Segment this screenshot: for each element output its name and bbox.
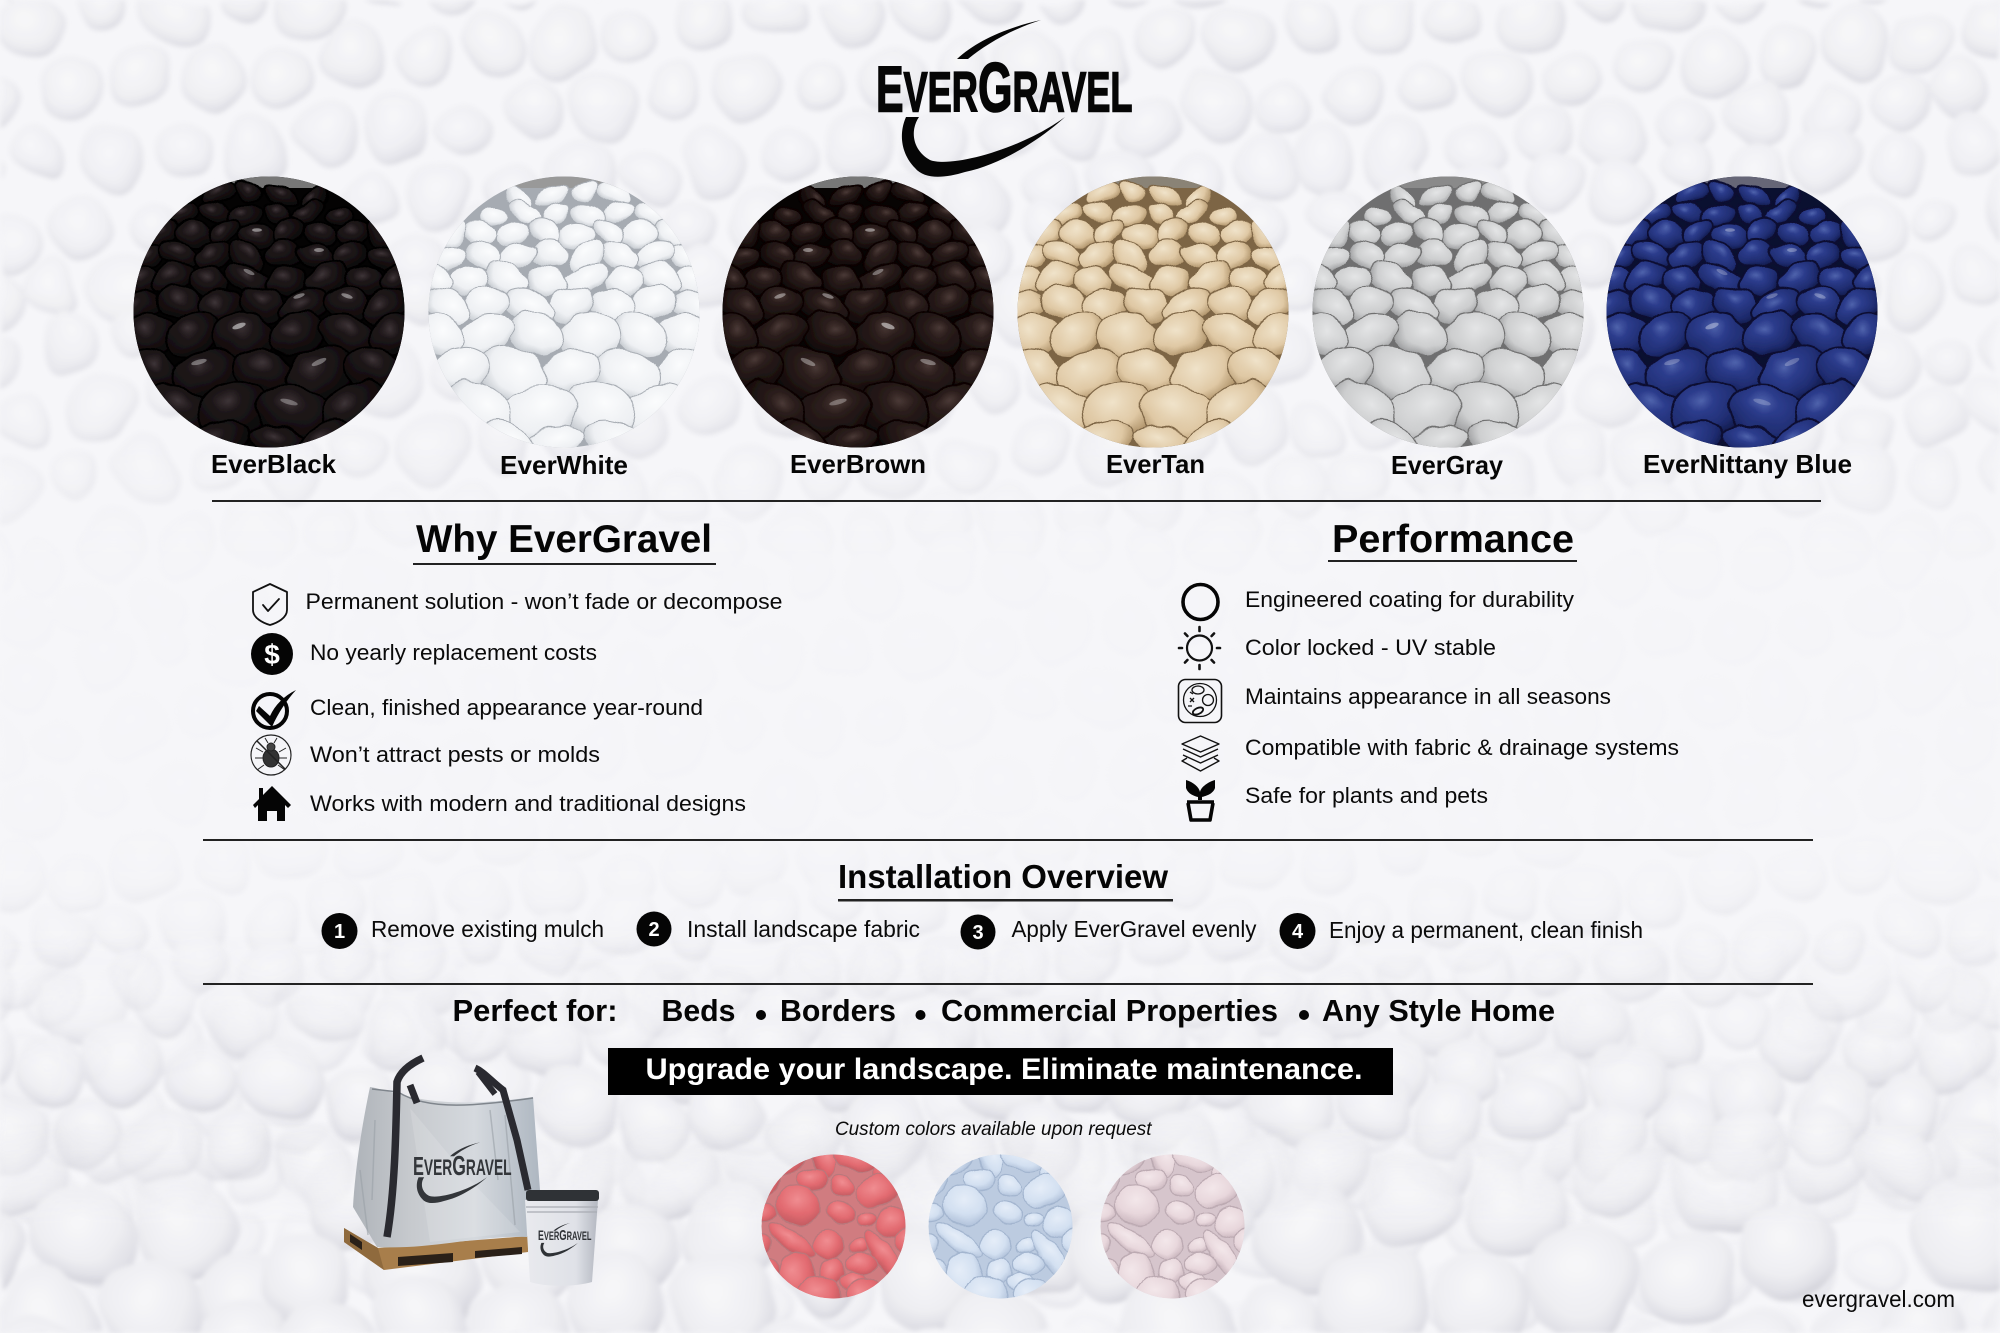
icon: shield	[253, 584, 287, 625]
perfect for row: Any Style Home	[1322, 993, 1555, 1028]
icon: dollar: $	[264, 639, 280, 670]
step 2: Install landscape fabric	[687, 916, 920, 942]
panel: performance	[1178, 518, 1679, 820]
step 3	[960, 914, 1257, 950]
step 4: Enjoy a permanent, clean finish	[1329, 917, 1643, 943]
icon: layers	[1182, 736, 1219, 771]
text: engineered coating: Engineered coating for durability	[1245, 587, 1574, 612]
text: permanent solution: Permanent solution - won’t fade or decompose	[306, 589, 782, 614]
swatch: EverGray	[1312, 176, 1584, 448]
icon: dollar	[251, 633, 293, 675]
swatch: EverNittany Blue	[1606, 176, 1878, 448]
logo: EVERGRAVEL	[876, 49, 1132, 127]
icon: plant pot	[1186, 780, 1215, 820]
label: EverTan: EverTan	[1106, 449, 1205, 479]
text: no pests: Won’t attract pests or molds	[310, 742, 600, 767]
swatch: EverBlack	[134, 176, 404, 448]
text: safe for plants: Safe for plants and pets	[1245, 783, 1488, 808]
logo	[876, 20, 1132, 177]
swatch: custom blue	[928, 1154, 1072, 1298]
step 2	[636, 912, 920, 946]
panel: why evergravel	[251, 518, 782, 821]
label: EverBrown: EverBrown	[790, 449, 926, 479]
text: maintains appearance: Maintains appearance in all seasons	[1245, 684, 1611, 709]
step 1: 1	[334, 921, 345, 943]
perfect for row: Perfect for:	[452, 993, 618, 1028]
label: EverNittany Blue: EverNittany Blue	[1643, 449, 1852, 479]
text: no yearly replacement costs: No yearly replacement costs	[310, 640, 597, 665]
bag	[353, 1058, 540, 1247]
step 1: Remove existing mulch	[371, 916, 604, 942]
swatch: custom red	[762, 1154, 906, 1298]
text: works with designs: Works with modern and traditional designs	[310, 791, 746, 816]
text: color locked: Color locked - UV stable	[1245, 635, 1496, 660]
step 3: Apply EverGravel evenly	[1012, 916, 1257, 942]
heading: why evergravel: Why EverGravel	[416, 518, 712, 561]
step 4: 4	[1292, 921, 1304, 943]
label: EverGray: EverGray	[1391, 450, 1504, 480]
swatch: custom pink	[1083, 1133, 1265, 1316]
bag: EVERGRAVEL	[413, 1150, 512, 1181]
icon: house	[253, 786, 291, 821]
icon: sun	[1179, 627, 1220, 669]
perfect for row	[452, 993, 1555, 1028]
heading: performance: Performance	[1332, 518, 1574, 561]
pallet	[344, 1228, 528, 1270]
website: evergravel.com	[1802, 1286, 1955, 1312]
step 3: 3	[972, 922, 984, 944]
perfect for row: Borders	[780, 993, 896, 1028]
step 1	[322, 913, 604, 949]
banner	[608, 1048, 1393, 1095]
bucket	[525, 1190, 599, 1286]
text: custom colors: Custom colors available upon request	[835, 1119, 1152, 1140]
label: EverBlack: EverBlack	[211, 449, 337, 479]
banner: Upgrade your landscape. Eliminate maintenance.	[646, 1053, 1362, 1086]
heading: installation overview: Installation Overview	[838, 858, 1168, 895]
icon: seasons	[1178, 680, 1222, 722]
icon: check	[253, 690, 296, 728]
text: clean finished: Clean, finished appearance year-round	[310, 695, 703, 720]
perfect for row: Commercial Properties	[941, 993, 1278, 1028]
icon: ring	[1183, 584, 1218, 620]
swatch: EverTan	[1018, 176, 1288, 448]
label: EverWhite: EverWhite	[500, 450, 628, 480]
text: compatible: Compatible with fabric & drainage systems	[1245, 735, 1679, 760]
panel: installation overview	[322, 858, 1643, 950]
step 2: 2	[648, 919, 660, 941]
perfect for row: Beds	[662, 993, 736, 1028]
swatch: EverWhite	[428, 176, 700, 448]
step 4	[1280, 913, 1643, 949]
swatch: EverBrown	[722, 176, 994, 448]
bucket: EVERGRAVEL	[538, 1227, 592, 1244]
product: bag on pallet and bucket	[344, 1058, 599, 1286]
icon: no pests	[251, 735, 291, 775]
